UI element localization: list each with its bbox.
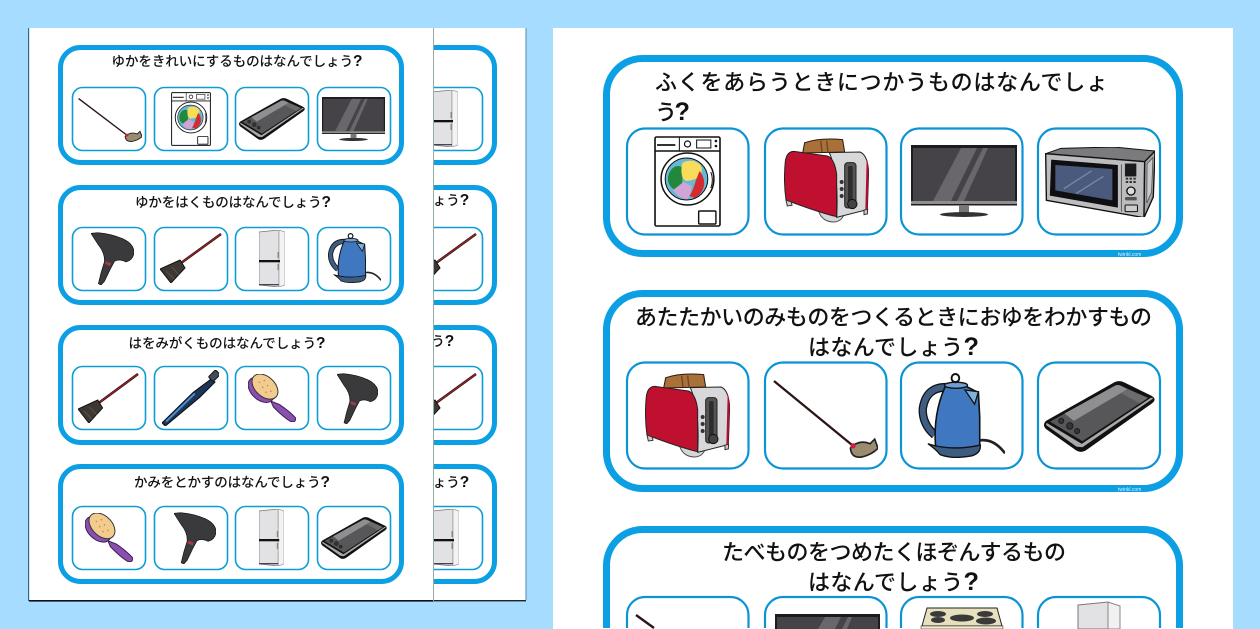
- back card 2: ょう?: [433, 192, 469, 209]
- question: ゆかをきれいにするものはなんでしょう?: [112, 53, 362, 70]
- card: boiling water: [606, 294, 1180, 493]
- question line 2: はなんでしょう?: [808, 333, 979, 361]
- question: あたたかいのみものをつくるときにおゆをわかすもの: [635, 305, 1152, 330]
- icon: broom: [78, 374, 138, 423]
- question: かみをとかすのはなんでしょう?: [134, 474, 330, 491]
- icon: hair dryer: [91, 233, 134, 285]
- icon: fridge: [1078, 602, 1120, 629]
- icon: kettle: [331, 234, 381, 283]
- watermark: twinkl.com: [1118, 487, 1141, 493]
- icon: toothbrush: [162, 370, 220, 426]
- question: はをみがくものはなんでしょう?: [128, 335, 326, 352]
- card: hair combing: [60, 466, 402, 582]
- question: たべものをつめたくほぞんするもの: [722, 540, 1066, 565]
- icon: mop: [636, 615, 654, 628]
- icon: smartphone: [239, 98, 305, 140]
- card: floor sweeping: [60, 188, 402, 302]
- icon: mop: [774, 381, 878, 457]
- panel: back worksheet: [120, 28, 526, 601]
- icon: washing machine: [655, 137, 720, 226]
- question line 2: はなんでしょう?: [808, 568, 979, 596]
- icon: television: [775, 614, 880, 629]
- question line 2: う?: [655, 98, 690, 126]
- icon: toaster: [645, 374, 730, 457]
- watermark: twinkl.com: [1118, 252, 1141, 258]
- back card 3: ょう?: [418, 333, 454, 350]
- icon: fridge: [259, 230, 285, 287]
- question: ゆかをはくものはなんでしょう?: [135, 194, 331, 211]
- icon: television: [322, 97, 385, 141]
- icon: broom: [160, 234, 221, 283]
- icon: hair dryer: [337, 374, 378, 424]
- card: washing clothes: [606, 58, 1180, 258]
- icon: hair brush: [243, 369, 296, 422]
- panel: right enlarged worksheet: [553, 28, 1233, 629]
- card: floor cleaning: [60, 48, 402, 162]
- icon: kettle: [923, 374, 1005, 457]
- back card 4: ょう?: [433, 474, 469, 491]
- card: tooth brushing: [60, 328, 402, 442]
- back card 3: [150, 328, 494, 442]
- icon: fridge: [259, 509, 284, 566]
- icon: smartphone: [1044, 381, 1155, 452]
- icon: microwave: [1046, 147, 1155, 218]
- card: food storage: [606, 530, 1180, 629]
- icon: smartphone: [321, 517, 387, 559]
- icon: toaster: [784, 139, 869, 222]
- back card 4: [150, 466, 494, 582]
- icon: washing machine: [172, 93, 210, 145]
- question: ふくをあらうときにつかうものはなんでしょ: [655, 70, 1108, 95]
- icon: mop: [79, 99, 142, 142]
- panel: front worksheet: [28, 28, 434, 602]
- back card 2: [150, 188, 494, 302]
- icon: stove: [921, 608, 1003, 629]
- back card 1: [150, 48, 494, 162]
- icon: television: [911, 145, 1017, 217]
- icon: hair dryer: [174, 513, 216, 564]
- icon: hair brush: [80, 508, 133, 562]
